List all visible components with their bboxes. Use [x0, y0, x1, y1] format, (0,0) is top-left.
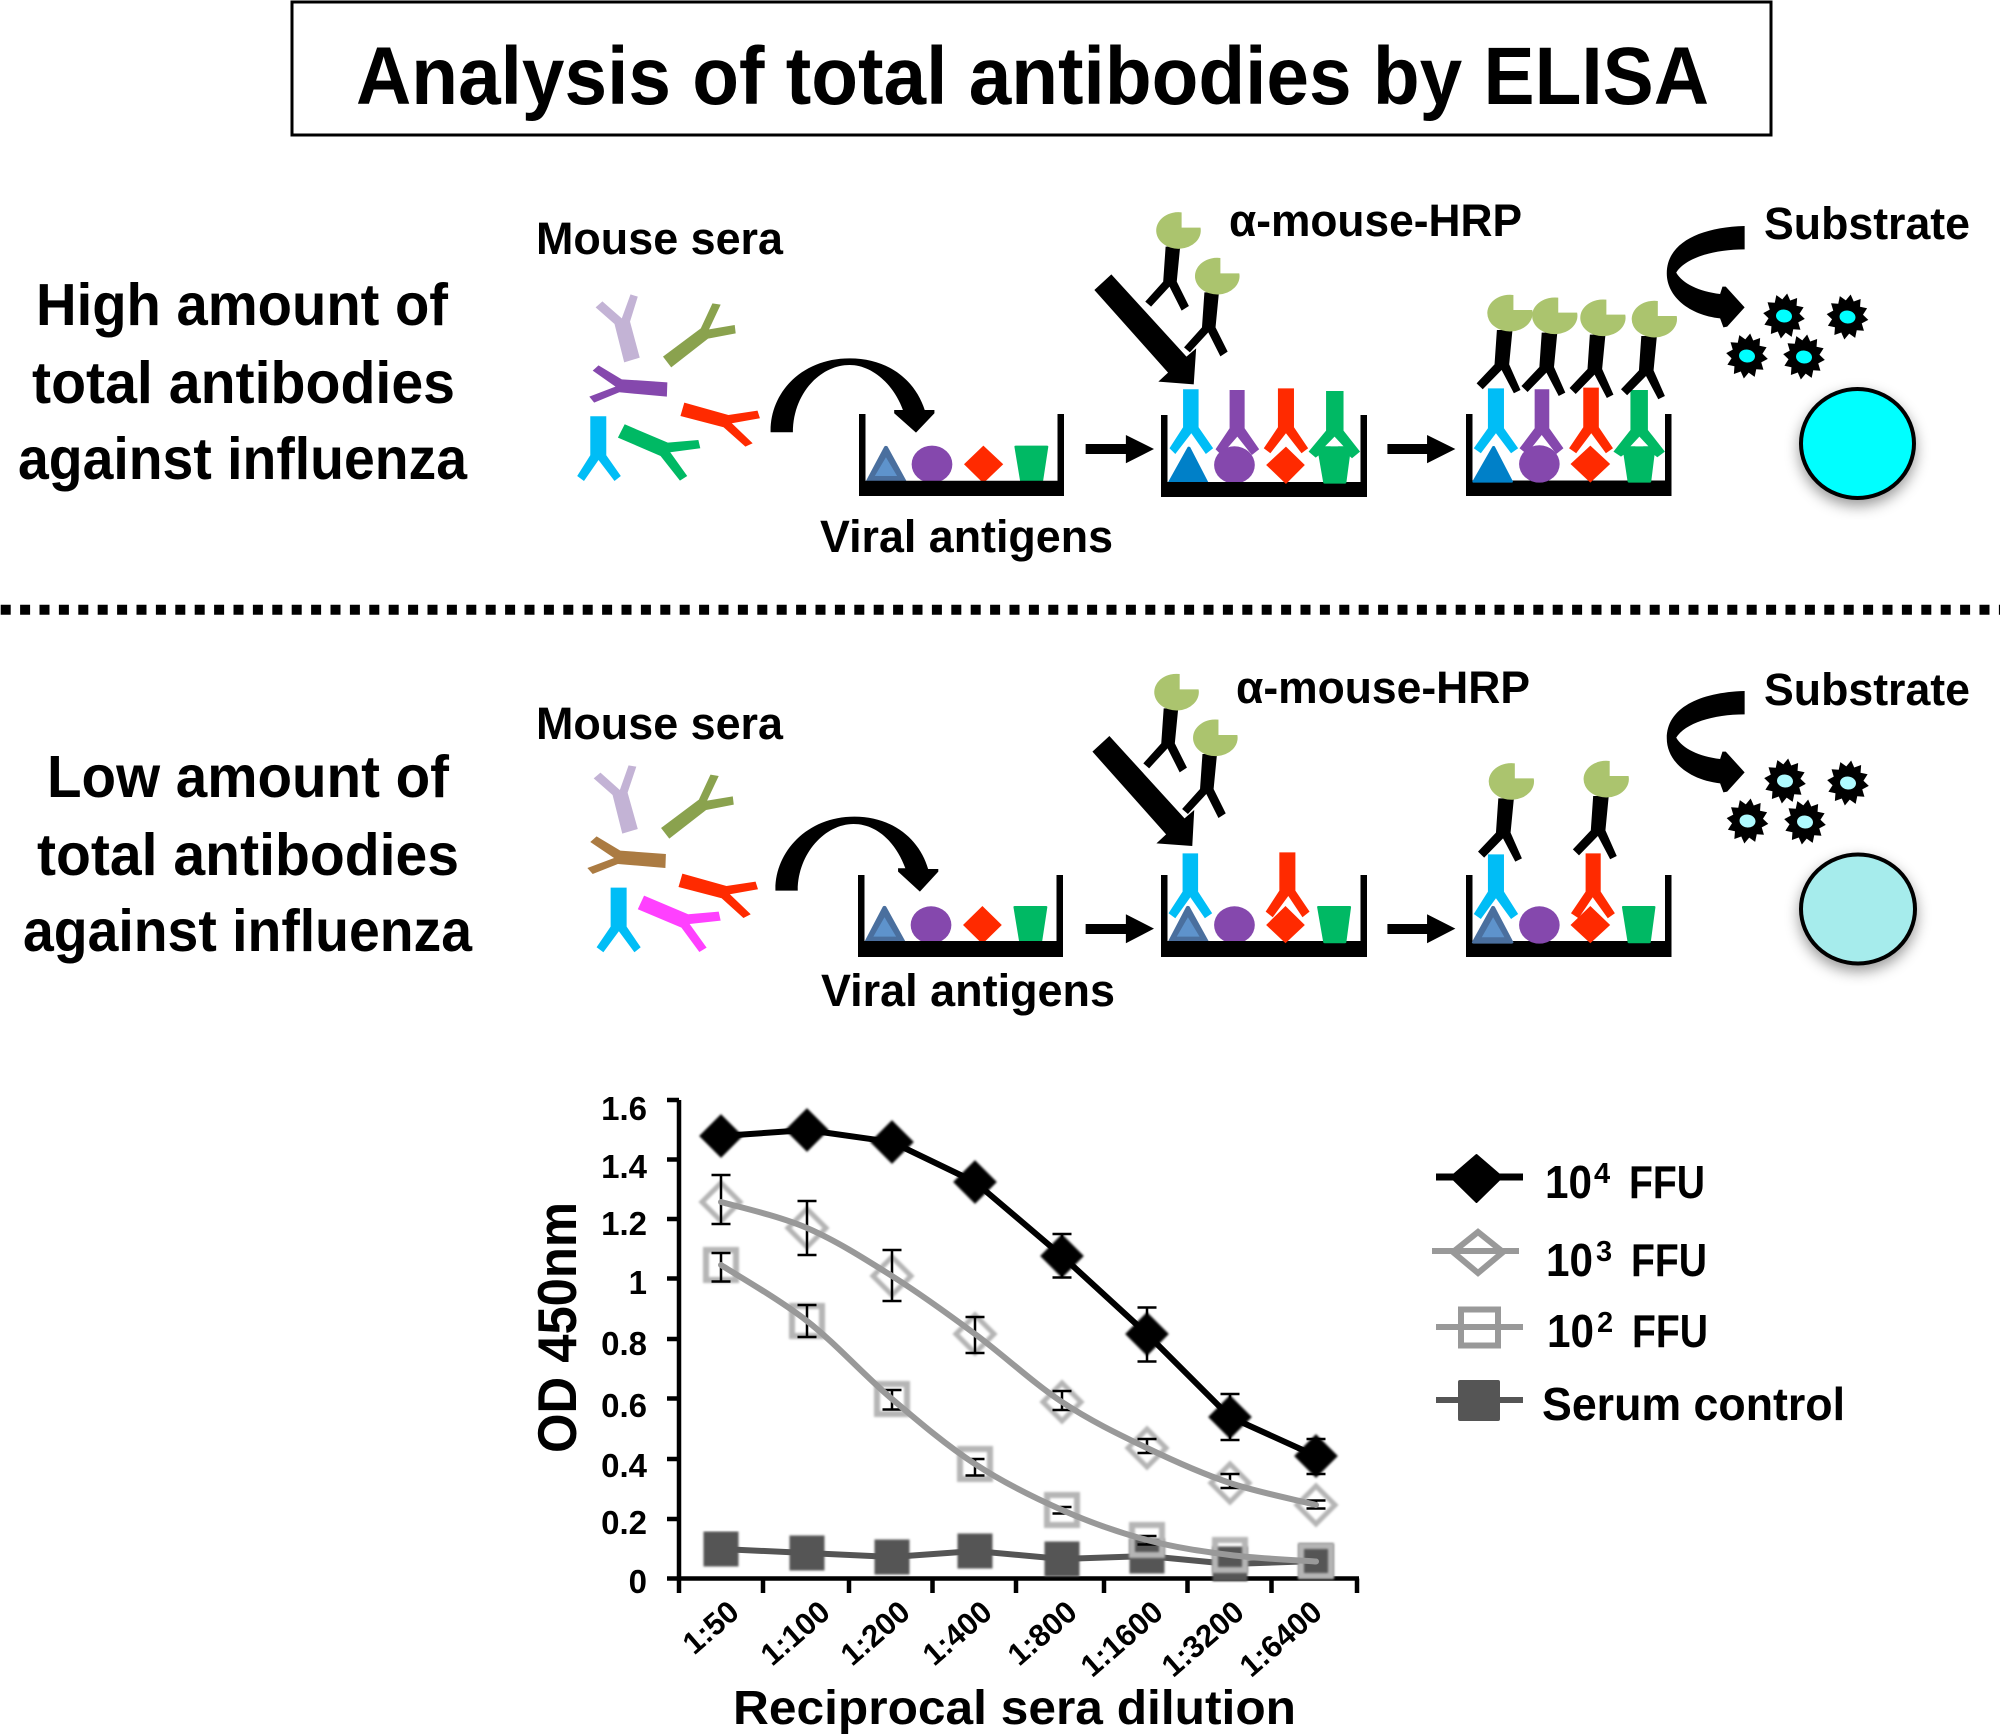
secondary antibody with HRP, lower [1184, 258, 1240, 356]
legend item: 10^3 FFU: FFU [1631, 1234, 1707, 1286]
panel: low row, left diagram [587, 674, 1255, 952]
y axis labels [601, 1090, 648, 1600]
axes and ticks [667, 1100, 1359, 1593]
HRP antibody one [1478, 763, 1534, 862]
x axis labels: 1:200 [834, 1594, 917, 1672]
legend item: 10^4 FFU [1436, 1155, 1705, 1208]
HRP antibody two [1573, 761, 1629, 859]
label: viral antigens, high row: Viral antigens [820, 511, 1113, 562]
HRP antibody three [1570, 299, 1626, 398]
arrow: curved to well [771, 358, 934, 433]
bound antibody stacks, third well [1474, 853, 1654, 944]
heading: low amount: Low amount of [47, 744, 449, 810]
readout circle: weak signal [1801, 854, 1915, 964]
x axis labels [676, 1594, 1329, 1684]
HRP antibody two [1521, 297, 1577, 396]
x axis labels: 1:6400 [1233, 1594, 1329, 1684]
line chart: OD 450nm vs dilution [526, 1090, 1359, 1735]
x axis labels: 1:800 [1001, 1594, 1084, 1672]
label: alpha-mouse-HRP, low row: α-mouse-HRP [1236, 662, 1530, 713]
heading: high amount: total antibodies [32, 350, 455, 416]
heading: low amount [23, 744, 473, 964]
series: 10^3 FFU [702, 1175, 1335, 1524]
legend item: 10^2 FFU [1436, 1305, 1708, 1357]
y axis labels: 0.4 [601, 1447, 648, 1484]
heading: high amount: against influenza [18, 426, 468, 492]
secondary antibody with HRP [1145, 212, 1201, 311]
legend [1432, 1155, 1845, 1430]
label: substrate, low row: Substrate [1764, 664, 1970, 715]
axis title: reciprocal sera dilution: Reciprocal sera dilution [733, 1682, 1296, 1735]
arrow: big diagonal [1092, 736, 1194, 846]
antigens in first well [867, 906, 1046, 944]
legend item: 10^2 FFU: FFU [1632, 1305, 1708, 1357]
secondary antibody with HRP [1143, 674, 1199, 772]
well: high row, first [859, 414, 1064, 496]
secondary antibody with HRP, lower [1182, 719, 1238, 818]
x axis labels: 1:100 [754, 1594, 837, 1672]
well: low row, third [1466, 875, 1672, 957]
HRP antibody one [1477, 295, 1533, 393]
bound antibody stacks, third well [1474, 388, 1665, 483]
legend item: 10^4 FFU: 10 [1545, 1156, 1592, 1208]
bound red and green antibodies, second well [1264, 388, 1360, 484]
heading: low amount: total antibodies [37, 822, 459, 888]
legend item: 10^4 FFU: FFU [1629, 1156, 1705, 1208]
title: Analysis of total antibodies by ELISA [356, 31, 1709, 122]
well: high row, second [1161, 415, 1367, 497]
well: low row, second [1161, 875, 1367, 957]
arrow: step one [1086, 435, 1154, 463]
HRP antibody four [1621, 301, 1677, 399]
readout circle: strong signal [1801, 389, 1914, 498]
antigens in first well [868, 446, 1047, 483]
legend item: 10^3 FFU: 10 [1546, 1234, 1593, 1286]
heading: low amount: against influenza [23, 898, 473, 964]
y axis labels: 0.2 [601, 1504, 647, 1541]
axis title: OD 450nm: OD 450nm [526, 1202, 588, 1453]
y axis labels: 0.6 [601, 1387, 647, 1424]
bound blue and purple antibodies [1169, 389, 1259, 484]
legend item: 10^2 FFU: 2 [1597, 1307, 1613, 1339]
arrow: big diagonal [1094, 274, 1196, 384]
dotted divider [1, 605, 2000, 615]
bound blue antibody and free purple antigen [1169, 853, 1255, 944]
heading: high amount: High amount of [36, 272, 448, 338]
substrate particles, low row [1724, 756, 1872, 847]
label: viral antigens, low row: Viral antigens [821, 965, 1115, 1016]
x axis labels: 1:50 [676, 1594, 746, 1661]
arrow: step one [1086, 914, 1154, 943]
x axis labels: 1:1600 [1074, 1594, 1170, 1684]
heading: high amount [18, 272, 468, 492]
arrow: step two [1387, 435, 1455, 463]
well: low row, first [858, 875, 1063, 957]
series: 10^2 FFU [706, 1250, 1331, 1576]
label: mouse sera, high row: Mouse sera [536, 213, 784, 264]
series: 10^4 FFU [702, 1111, 1335, 1475]
legend item: 10^4 FFU: 4 [1594, 1158, 1610, 1190]
panel: low row, right diagram [1266, 691, 1745, 944]
y axis labels: 0.8 [601, 1325, 647, 1362]
y axis labels: 1.6 [601, 1090, 647, 1127]
substrate particles, high row [1723, 291, 1871, 382]
y axis labels: 1.4 [601, 1148, 648, 1185]
arrow: curved to well [775, 817, 938, 892]
legend item: serum control: Serum control [1542, 1378, 1845, 1430]
label: substrate, high row: Substrate [1764, 198, 1970, 249]
arrow: substrate curve [1667, 226, 1745, 327]
y axis labels: 0 [629, 1563, 647, 1600]
arrow: step two [1387, 914, 1455, 943]
y axis labels: 1.2 [601, 1205, 647, 1242]
legend item: 10^2 FFU: 10 [1547, 1305, 1594, 1357]
arrow: substrate curve [1667, 691, 1745, 792]
legend item: 10^3 FFU [1432, 1232, 1707, 1286]
legend item: 10^3 FFU: 3 [1596, 1236, 1612, 1268]
panel: high row, right diagram [1264, 226, 1745, 484]
title [292, 2, 1771, 135]
x axis labels: 1:3200 [1155, 1594, 1251, 1684]
label: alpha-mouse-HRP, high row: α-mouse-HRP [1229, 195, 1522, 246]
label: mouse sera, low row: Mouse sera [536, 698, 784, 749]
bound red antibody and free green antigen, second well [1266, 852, 1350, 943]
antibodies: mouse sera mix [587, 765, 758, 952]
series: serum control [705, 1533, 1332, 1580]
x axis labels: 1:400 [916, 1594, 999, 1672]
antibodies: mouse sera mix [577, 294, 760, 481]
y axis labels: 1 [629, 1264, 647, 1301]
panel: high row, left diagram [577, 212, 1259, 484]
well: high row, third [1466, 414, 1672, 496]
